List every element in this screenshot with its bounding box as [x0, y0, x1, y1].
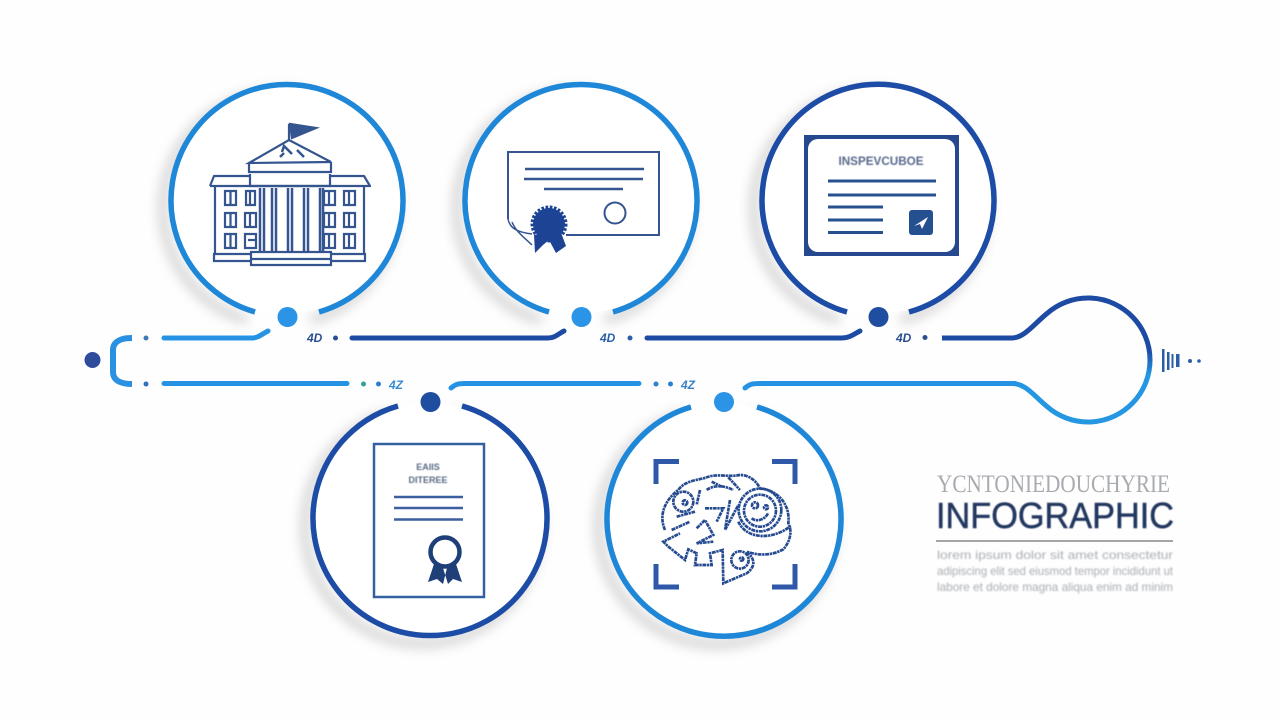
body text: adipiscing elit sed eiusmod tempor incididunt ut	[937, 564, 1174, 578]
node dot 1	[278, 307, 298, 327]
small track dots	[144, 335, 928, 386]
node dot 5	[714, 392, 734, 412]
heading: INFOGRAPHIC	[936, 495, 1174, 536]
timeline: lower track	[164, 384, 1015, 388]
circle card: degree document	[305, 403, 547, 644]
icon: university building	[210, 124, 370, 265]
track labels: 4Z	[680, 378, 696, 392]
body text: lorem ipsum dolor sit amet consectetur	[937, 548, 1173, 562]
icon: scan corners	[656, 462, 795, 587]
icon: diploma with ribbon: EAIIS	[416, 462, 440, 472]
timeline: upper track	[113, 298, 1150, 422]
body text: labore et dolore magna aliqua enim ad minim	[937, 580, 1173, 594]
circle card: document with badge	[754, 84, 994, 320]
icon: brain	[662, 475, 791, 583]
divider rule	[936, 540, 1173, 542]
start marker	[84, 352, 100, 368]
icon: certificate with seal	[508, 152, 659, 253]
node dot 3	[868, 307, 888, 327]
icon: framed document	[804, 135, 959, 256]
track labels: 4Z	[388, 378, 404, 392]
circle card: brain	[599, 403, 841, 644]
track labels: 4D	[895, 331, 912, 345]
icon: diploma with ribbon	[374, 444, 484, 597]
circle card: building	[163, 85, 403, 320]
track labels	[306, 331, 912, 392]
eyebrow text: YCNTONIEDOUCHYRIE	[937, 471, 1170, 498]
body text	[937, 548, 1174, 594]
track labels: 4D	[599, 331, 616, 345]
node dot 2	[572, 307, 592, 327]
track labels: 4D	[306, 331, 323, 345]
icon: framed document: INSPEVCUBOE	[838, 154, 924, 168]
icon: diploma with ribbon: DITEREE	[408, 475, 448, 485]
tail signal marks	[1162, 349, 1201, 372]
circle card: certificate	[457, 85, 697, 320]
node dot 4	[420, 392, 440, 412]
title block	[936, 471, 1174, 594]
